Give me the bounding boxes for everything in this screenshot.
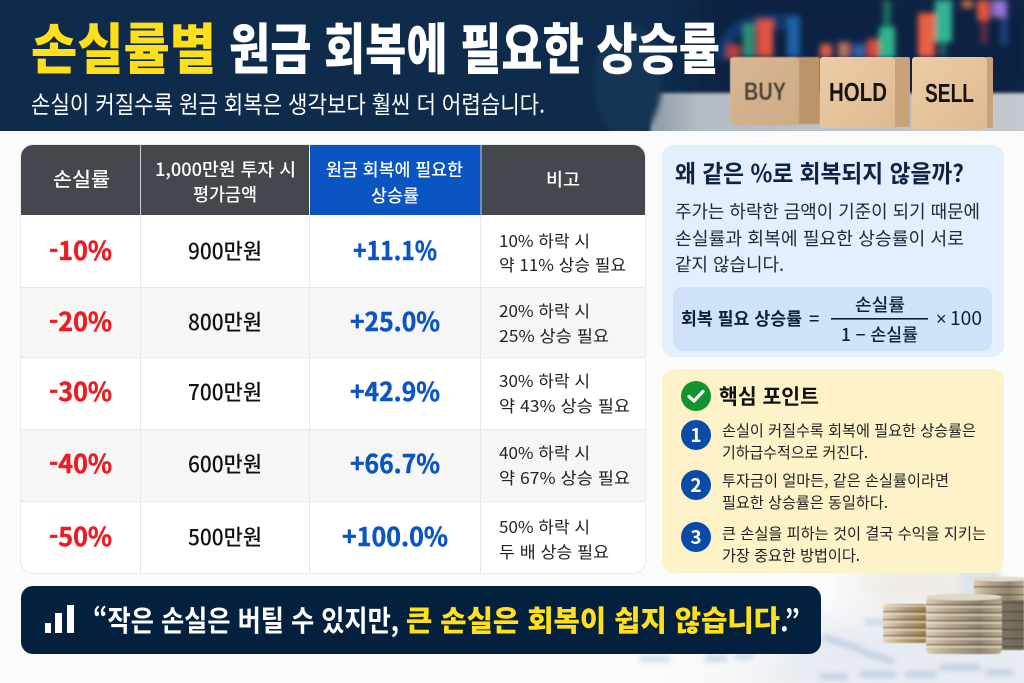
point 1: 손실이 커질수록 회복에 필요한 상승률은 [722,419,976,441]
explanation text: 주가는 하락한 금액이 기준이 되기 때문에 [675,198,980,224]
table row: -10% [49,228,626,276]
table row: -30%: 700만원 [188,376,262,407]
explanation text: 같지 않습니다. [675,251,784,277]
point 3 [681,522,986,566]
icon: coin stack left [883,604,927,643]
panel heading: 왜 같은 %로 회복되지 않을까? [675,154,964,189]
panel: why not the same percent [662,145,1004,357]
table row: -50% [49,514,609,563]
point 3: 3 [690,523,702,550]
table row: -40%: 40% 하락 시 [499,440,590,464]
table row: -10%: 약 11% 상승 필요 [499,252,626,276]
table row: -10%: -10% [49,231,112,268]
key points heading: 핵심 포인트 [719,381,819,411]
table row: -20%: 20% 하락 시 [499,298,590,322]
formula box [673,287,992,351]
point 1 [681,419,976,463]
formula box: 회복 필요 상승률 [681,306,802,331]
icon: coin stack center [926,594,1002,654]
table row: -20%: 25% 상승 필요 [499,323,609,347]
table row: -10%: 900만원 [188,235,262,266]
background image: paper and coins [640,560,1024,683]
table row: -40%: 약 67% 상승 필요 [499,465,630,489]
icon: bar chart [45,605,74,633]
icon: HOLD wooden block [820,57,910,128]
header banner [0,0,1024,138]
table row: -10%: +11.1% [353,231,437,268]
table row: -20% [49,298,609,347]
icon: green check [681,381,711,411]
quote bar [21,586,821,654]
formula box: = [809,305,819,331]
table row: -50%: 두 배 상승 필요 [499,539,609,563]
table row: -50%: +100.0% [342,517,448,554]
point 3: 가장 중요한 방법이다. [722,544,860,566]
table row: -40% [49,440,630,489]
explanation text [675,198,980,277]
background image: table surface [650,93,1024,138]
icon: coin stack right [974,576,1024,650]
point 2 [681,469,949,513]
table row: -50%: -50% [49,517,112,554]
table row: -40%: 600만원 [188,448,262,479]
table row: -30%: -30% [49,372,112,409]
quote text: 큰 손실은 회복이 쉽지 않습니다 [406,598,780,640]
table header: 상승률 [371,183,419,208]
table header: 1,000만원 투자 시 [155,156,296,182]
table row: -30%: 약 43% 상승 필요 [499,393,630,417]
title: 원금 회복에 필요한 상승률 [229,5,720,85]
panel: key points [662,369,1004,573]
table row: -20%: -20% [49,302,112,339]
table row: -30%: +42.9% [350,372,440,409]
table row: -40%: -40% [49,444,112,481]
point 2: 2 [690,471,702,498]
table row: -40%: +66.7% [350,444,440,481]
title: 손실률별 [31,5,216,85]
formula box: 1 − 손실률 [841,322,918,347]
table header: 손실률 [53,163,110,192]
icon: SELL wooden block [912,57,993,129]
icon: SELL wooden block: SELL [925,78,974,108]
table row: -10%: 10% 하락 시 [499,228,590,252]
table row: -50%: 50% 하락 시 [499,514,590,538]
table row: -30% [49,368,630,417]
subtitle: 손실이 커질수록 원금 회복은 생각보다 훨씬 더 어렵습니다. [31,85,545,120]
title [31,5,720,85]
table row: -20%: 800만원 [188,306,262,337]
icon: BUY wooden block: BUY [744,78,786,106]
point 1: 1 [690,421,702,448]
formula box: × [936,309,947,329]
panel: recovery table [20,144,646,574]
background image: market chart candles [698,0,1024,91]
quote text: .” [780,598,800,640]
background image: dark rounded shape [594,22,662,138]
table row: -30%: 30% 하락 시 [499,368,590,392]
table header: 원금 회복에 필요한 [326,157,463,182]
point 3: 큰 손실을 피하는 것이 결국 수익을 지키는 [722,522,986,544]
formula box: 100 [950,304,982,331]
point 2: 투자금이 얼마든, 같은 손실률이라면 [722,469,949,491]
point 2: 필요한 상승률은 동일하다. [722,491,888,513]
quote text: “작은 손실은 버틸 수 있지만, [93,598,399,640]
table header: 비고 [546,166,580,192]
table header: 평가금액 [193,181,257,207]
explanation text: 손실률과 회복에 필요한 상승률이 서로 [675,225,964,251]
quote text [93,598,800,640]
icon: HOLD wooden block: HOLD [829,77,887,107]
table row: -20%: +25.0% [350,302,440,339]
table rows [21,215,645,573]
table row: -50%: 500만원 [188,521,262,552]
point 1: 기하급수적으로 커진다. [722,441,868,463]
table header [21,145,645,215]
formula box: 손실률 [855,292,905,317]
icon: BUY wooden block [730,57,820,125]
